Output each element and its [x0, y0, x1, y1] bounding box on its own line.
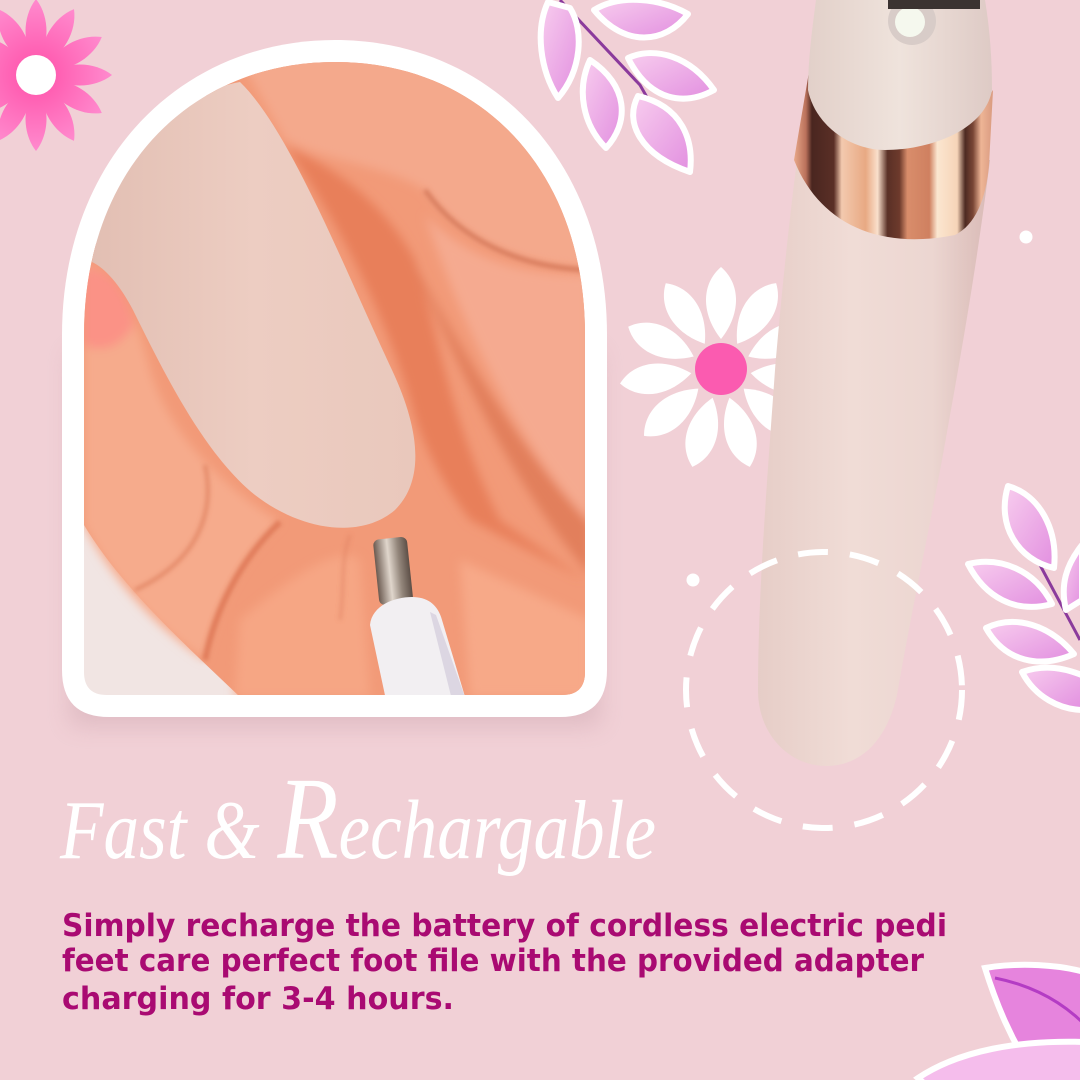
- description text: [62, 908, 947, 1017]
- icon: pink flower top left: [0, 0, 112, 151]
- lower palm light: [235, 556, 370, 697]
- icon: leaves right: [968, 486, 1080, 710]
- upper finger: [249, 62, 579, 268]
- inner cavity: [289, 148, 565, 568]
- dashed highlight circle: [686, 552, 962, 828]
- right palm finger: [425, 215, 590, 520]
- hand shading: [84, 50, 600, 697]
- photo: [84, 50, 600, 700]
- product body: [758, 160, 990, 766]
- panel shadow: [70, 351, 600, 726]
- icon: leaves top centre: [541, 0, 714, 172]
- description text: charging for 3-4 hours.: [62, 981, 454, 1017]
- cap: [808, 0, 992, 150]
- icon: large flower bottom right: [918, 965, 1080, 1080]
- rose gold band: [794, 66, 993, 239]
- description text: Simply recharge the battery of cordless electric pedi: [62, 908, 947, 944]
- description text: feet care perfect foot file with the provided adapter: [62, 943, 925, 979]
- thumb: [84, 265, 280, 660]
- icon: white daisy with pink centre: [618, 267, 824, 471]
- LED light: [888, 0, 936, 45]
- charging plug: [373, 536, 413, 606]
- white arch frame: [62, 40, 607, 717]
- palm: [84, 50, 590, 697]
- photo panel: charging the device: [62, 40, 607, 726]
- device capsule: [92, 82, 415, 528]
- product: electric foot file: [758, 0, 993, 766]
- decorative dots: [686, 230, 1032, 586]
- thumb tip: [84, 268, 134, 348]
- title: Fast & Rechargable: [59, 753, 656, 884]
